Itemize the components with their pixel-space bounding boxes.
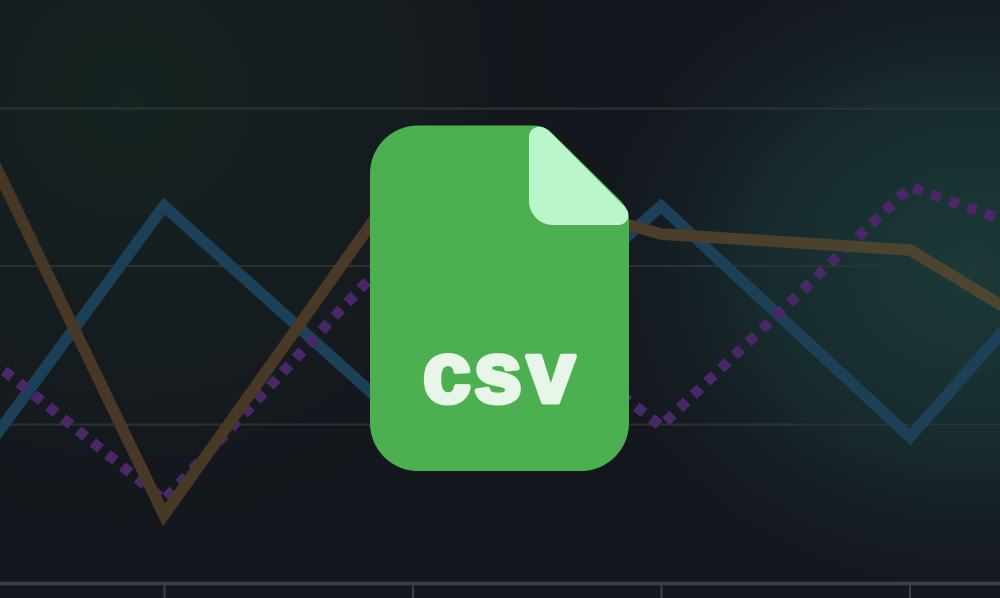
file label: csv [423,325,575,421]
folded corner [529,127,628,225]
series: purple dotted line [0,187,1000,500]
file body [370,126,629,471]
chart x axis [0,584,1000,598]
icon: CSV file [370,126,629,471]
series: blue line [0,155,1000,545]
